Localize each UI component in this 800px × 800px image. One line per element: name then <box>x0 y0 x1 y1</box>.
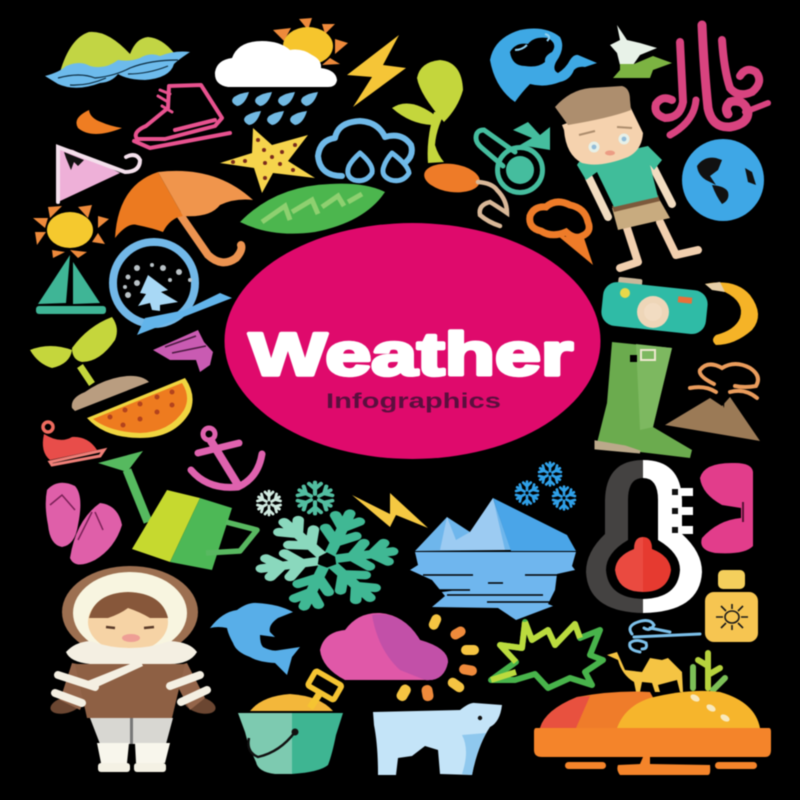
parka <box>75 664 185 718</box>
icon: black and white thermometer <box>586 460 702 613</box>
icon: snow globe <box>113 242 232 335</box>
icon: polar bear <box>373 703 502 775</box>
icon: seedling in soil <box>30 317 149 411</box>
cloud <box>215 41 337 87</box>
icon: sprout with seed <box>392 60 507 226</box>
icon: pink sunglasses <box>700 463 753 553</box>
icon: blue ocean wave <box>490 29 597 102</box>
icon: lightning bolt <box>347 35 406 107</box>
collar and sash <box>66 641 197 664</box>
icon: teal camera <box>600 277 709 335</box>
icon: ice cream outline <box>530 202 593 265</box>
hair <box>89 592 168 618</box>
icon: blue wind lines <box>630 621 700 652</box>
icon: iceberg <box>410 498 576 620</box>
trousers <box>90 718 173 744</box>
icon: blue snowflake top <box>538 463 562 485</box>
face <box>579 127 632 135</box>
character: girl in eskimo parka <box>48 566 218 772</box>
icon: blue snowflake right <box>552 487 576 509</box>
icon: ice skate <box>134 85 230 148</box>
icon: red winter hat <box>43 422 104 465</box>
icon: watering can <box>98 451 257 570</box>
left hill <box>540 692 670 728</box>
dark half <box>586 460 643 613</box>
arms <box>589 165 672 217</box>
icon: teal thermometer with down arrow <box>476 122 550 192</box>
icon: starfish <box>220 128 315 193</box>
icon: pink anchor <box>191 428 262 487</box>
icon: snowy mountain with hook <box>58 147 140 202</box>
boots <box>97 743 170 763</box>
icon: sailboat <box>36 255 106 314</box>
icon: mountains and waves <box>45 32 190 88</box>
face <box>88 592 168 652</box>
hair <box>555 86 631 125</box>
tick marks <box>672 488 693 534</box>
tube interior <box>606 478 680 599</box>
icon: sunscreen bottle <box>705 570 758 642</box>
icon: volcano with smoke <box>665 364 760 441</box>
icon: blue dolphin <box>210 603 300 675</box>
icon: green rain boot <box>596 342 692 458</box>
hood <box>62 566 198 658</box>
head <box>562 100 643 165</box>
icon: rain cloud outline <box>318 121 412 181</box>
character: boy in green shirt <box>555 86 698 268</box>
icon: small teal snowflake <box>296 482 334 514</box>
shorts <box>612 197 670 230</box>
mittens <box>48 693 84 717</box>
red mercury <box>615 537 643 592</box>
white half <box>643 460 702 613</box>
right hill <box>617 691 760 728</box>
cactus <box>693 653 725 690</box>
icon: banana <box>705 282 758 345</box>
icon: pink wind swirls <box>655 25 768 135</box>
icon: sand bucket with shovel <box>238 671 343 774</box>
pink ellipse <box>224 223 600 459</box>
sun behind cloud <box>273 18 348 65</box>
icon: camel on cactus desert <box>534 652 771 775</box>
icon: pink flip flops <box>46 483 122 565</box>
ground <box>534 728 771 757</box>
icon: yellow lightning <box>352 493 428 528</box>
icon: pink cloud with sun pills <box>320 613 479 703</box>
heading: Weather <box>249 321 573 388</box>
shirt <box>577 146 662 207</box>
subtitle: Infographics <box>326 390 501 413</box>
raindrops <box>232 92 318 125</box>
icon: cloud with sun and rain <box>215 18 348 125</box>
icon: blue snowflake left <box>515 482 539 504</box>
icon: pink tornado <box>153 330 213 372</box>
sleeve stripes <box>55 675 207 703</box>
sleeves <box>60 663 205 710</box>
icon: green leaf <box>240 184 385 234</box>
icon: small white snowflake <box>257 491 281 515</box>
icon: watermelon slice <box>87 378 193 438</box>
icon: crescent moon <box>76 110 122 134</box>
legs <box>620 228 638 268</box>
icon: snowy pine tree <box>610 25 672 78</box>
title badge <box>224 223 600 459</box>
icon: earth globe <box>682 139 764 221</box>
icon: large green snowflake <box>259 510 395 610</box>
icon: small sun <box>33 205 109 258</box>
icon: spiky maple leaf outline <box>491 622 603 688</box>
icon: orange umbrella <box>115 171 253 262</box>
camel <box>607 652 683 692</box>
